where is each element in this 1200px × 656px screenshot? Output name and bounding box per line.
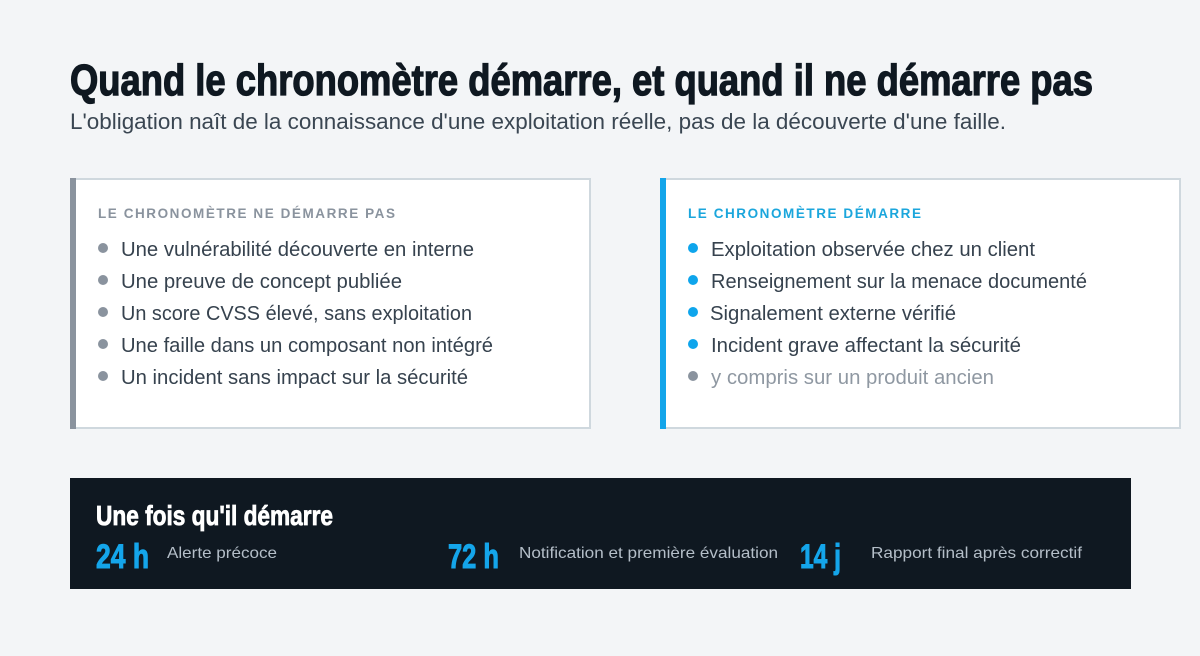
list: non-triggers: Une faille dans un composant non intégré [121,335,493,357]
deadline: 14 j: Rapport final après correctif [871,545,1083,562]
deadline: 24 h: 24 h [96,538,149,576]
deadline: 72 h: 72 h [448,538,499,576]
panel title: Une fois qu'il démarre [96,500,333,531]
list: non-triggers: Un score CVSS élevé, sans exploitation [121,303,472,325]
list: non-triggers: Une preuve de concept publiée [121,271,402,293]
panel: une fois qu'il démarre [70,478,1131,589]
deadline: 72 h: Notification et première évaluation [519,545,778,562]
list: triggers [688,239,1087,389]
list: non-triggers [98,239,493,389]
list: triggers: y compris sur un produit ancien [711,367,994,389]
subtitle: L'obligation naît de la connaissance d'une exploitation réelle, pas de la découverte d'une faille. [70,109,1006,134]
list: non-triggers: Une vulnérabilité découverte en interne [121,239,474,261]
deadline: 14 j [800,538,1083,576]
panel: le chronomètre démarre [660,178,1180,429]
list: triggers: Renseignement sur la menace documenté [711,271,1087,293]
panel heading: ne démarre pas: LE CHRONOMÈTRE NE DÉMARRE PAS [98,206,395,221]
panel: le chronomètre ne démarre pas [70,178,590,429]
deadline: 72 h [448,538,778,576]
list: triggers: Exploitation observée chez un client [711,239,1035,261]
deadline: 14 j: 14 j [800,538,841,576]
deadline: 24 h: Alerte précoce [167,545,277,562]
list: triggers: Incident grave affectant la sécurité [711,335,1021,357]
deadline: 24 h [96,538,277,576]
panel heading: démarre: LE CHRONOMÈTRE DÉMARRE [688,206,921,221]
list: non-triggers: Un incident sans impact sur la sécurité [121,367,468,389]
list: triggers: Signalement externe vérifié [710,303,956,325]
